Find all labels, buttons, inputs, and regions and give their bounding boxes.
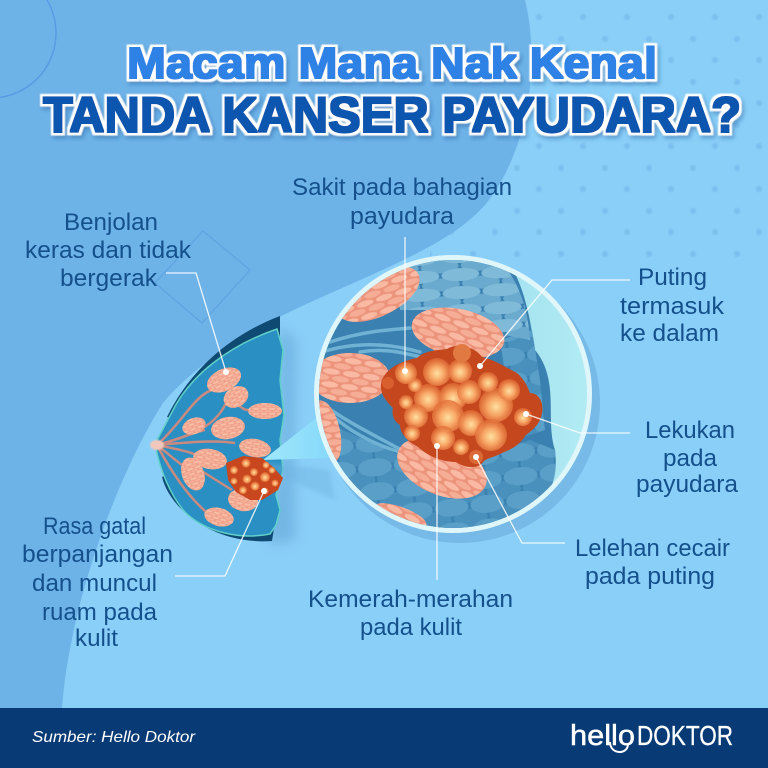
lobule bottom [376, 503, 426, 526]
label: Puting: Puting [638, 264, 707, 291]
label: Rasa gatal: kulit [75, 625, 118, 652]
label: Puting [620, 264, 725, 347]
logo [570, 720, 733, 752]
lobule left [319, 353, 388, 403]
label: Sakit: payudara [350, 203, 455, 230]
label: Benjolan: bergerak [60, 265, 158, 292]
title line 2: TANDA KANSER PAYUDARA? [43, 87, 741, 143]
blue tissue [319, 260, 556, 528]
label: Lelehan: pada puting [585, 563, 715, 590]
label: Kemerah [308, 586, 513, 641]
background: dot pattern [430, 0, 768, 270]
label: Lekukan: pada [663, 445, 718, 472]
decorative diamond outline [155, 231, 250, 323]
label: Rasa gatal: Rasa gatal [43, 513, 146, 540]
lobule far left [319, 400, 342, 460]
label: Sakit [292, 174, 512, 230]
label: Benjolan [25, 209, 192, 292]
leader line: Lekukan [523, 411, 630, 433]
muscle streaks [320, 328, 425, 455]
label: Sakit: Sakit pada bahagian [292, 174, 512, 201]
small lobules [177, 362, 282, 530]
label: Benjolan: Benjolan [64, 209, 158, 236]
magnifier cone [263, 415, 335, 500]
label: Puting: ke dalam [620, 320, 719, 347]
small breast illustration [150, 316, 296, 545]
title [43, 39, 741, 143]
label: Rasa gatal: ruam pada [42, 599, 158, 626]
label: Lekukan: Lekukan [645, 417, 735, 444]
label: Rasa gatal: berpanjangan [22, 541, 173, 568]
lobule upper centre [412, 308, 504, 358]
label: Kemerah: pada kulit [360, 614, 462, 641]
tissue scallops upper [395, 255, 530, 340]
label: Lelehan [575, 535, 730, 590]
label: Lekukan: payudara [636, 471, 739, 498]
large tumour [381, 344, 542, 467]
tissue scallops right [500, 330, 545, 440]
label: Rasa gatal: dan muncul [32, 570, 157, 597]
lobule upper left [342, 267, 420, 322]
title line 1: Macam Mana Nak Kenal [127, 39, 657, 88]
lobule lower [397, 440, 487, 499]
source: Sumber: Hello Doktor [32, 729, 196, 746]
decorative circle outline [0, 0, 56, 98]
small tumour [226, 456, 283, 500]
circle shadow [320, 263, 600, 543]
dark crescent lower [162, 470, 274, 541]
leader line: Puting [477, 280, 630, 369]
breast shadow [262, 325, 296, 545]
leader line: Lelehan [473, 454, 565, 543]
circle interior [319, 260, 587, 528]
leader line: Benjolan [166, 273, 229, 375]
ducts [157, 390, 250, 515]
magnified circle [306, 250, 600, 543]
dark crescent outline [167, 316, 280, 425]
breast body [155, 329, 284, 536]
label: Benjolan: keras dan tidak [25, 237, 192, 264]
logo: hello [570, 720, 635, 752]
label: Puting: termasuk [620, 293, 725, 320]
footer [0, 708, 768, 768]
label: Lekukan [636, 417, 739, 498]
background: darker blue curved shape [0, 0, 532, 708]
footer bar [0, 708, 768, 768]
label: Kemerah: Kemerah-merahan [308, 586, 513, 613]
nipple glow [150, 440, 164, 450]
label: Lelehan: Lelehan cecair [575, 535, 730, 562]
label: Rasa gatal [22, 513, 173, 652]
logo: DOKTOR [637, 720, 733, 751]
leader line: Sakit [402, 237, 408, 374]
interior background [319, 260, 587, 528]
leader line: Kemerah [434, 443, 440, 580]
leader line: Rasa gatal [175, 488, 267, 576]
circle white rim [314, 255, 592, 533]
tissue scallops lower [320, 420, 556, 530]
